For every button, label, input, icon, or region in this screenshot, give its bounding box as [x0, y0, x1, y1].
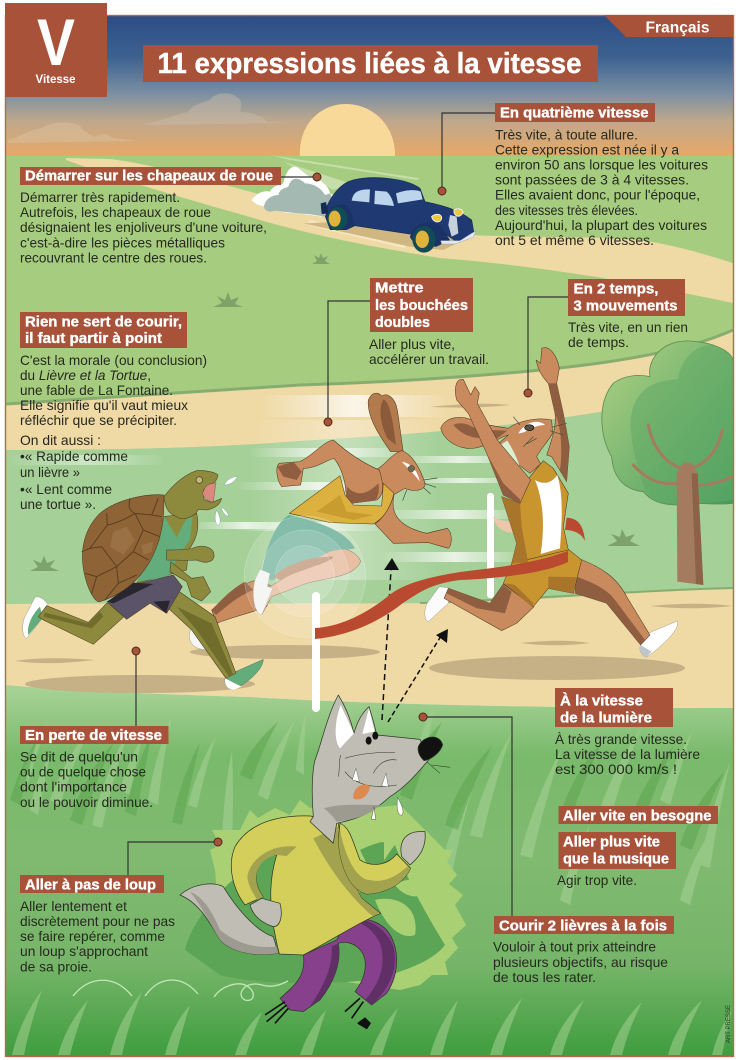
speed lines — [6, 395, 530, 580]
body: plusieurs objectifs, au risque — [493, 955, 668, 970]
leader — [324, 301, 370, 426]
title: 11 expressions liées à la vitesse — [158, 48, 582, 80]
smoke outline — [252, 167, 337, 217]
ears — [368, 393, 403, 452]
shell highlight — [110, 527, 153, 555]
body — [20, 190, 267, 266]
body: discrètement pour ne pas — [20, 914, 175, 929]
wolf — [180, 695, 450, 1028]
grille — [448, 215, 458, 237]
body: du Lièvre et la Tortue, — [20, 368, 151, 383]
back shoe — [425, 587, 452, 622]
body — [493, 940, 668, 985]
raised far arm — [536, 348, 569, 482]
bush: mid patches — [375, 880, 418, 936]
rear bar — [487, 493, 494, 598]
vest fold — [317, 495, 373, 520]
smoke — [252, 167, 337, 217]
body: est 300 000 km/s ! — [555, 762, 677, 777]
label — [20, 312, 187, 348]
body: Démarrer très rapidement. — [20, 190, 180, 205]
tail — [180, 884, 278, 955]
sky — [6, 16, 733, 157]
callout: Rien ne sert de courir — [20, 312, 207, 512]
body: recouvrant le centre des roues. — [20, 250, 207, 266]
shorts — [262, 515, 355, 581]
arrow up — [382, 558, 399, 720]
leader — [438, 113, 495, 195]
cloud: left — [8, 122, 140, 143]
car shadow — [303, 222, 470, 250]
tab word: Vitesse — [36, 74, 76, 86]
grass tufts — [30, 253, 640, 571]
teeth — [352, 768, 388, 787]
body: un lièvre » — [20, 465, 80, 480]
headlights — [432, 209, 463, 222]
label — [558, 832, 676, 869]
cloud: right — [145, 93, 296, 125]
ribbon tail — [565, 518, 585, 541]
front leg shade — [575, 577, 645, 645]
tree trunk — [677, 463, 703, 585]
callout: Démarrer sur les chapeaux de roue — [20, 167, 321, 266]
label: 3 mouvements — [574, 298, 678, 314]
shell — [82, 495, 164, 602]
car body — [324, 178, 474, 242]
glow rings — [244, 516, 366, 637]
shadow tortoise — [25, 675, 255, 693]
tyre — [412, 226, 436, 253]
callout: Mettre les bouchées doubles — [324, 278, 489, 426]
leg shade — [43, 612, 103, 628]
shorts — [503, 549, 582, 607]
ear inner — [380, 399, 396, 445]
body: c'est-à-dire les pièces métalliques — [20, 236, 225, 250]
torso shade — [502, 497, 528, 563]
tongue — [353, 784, 370, 799]
body: désignaient les enjoliveurs d'une voiture, — [20, 220, 267, 235]
body: ont 5 et même 6 vitesses. — [495, 233, 654, 248]
letter tab — [5, 3, 107, 97]
front wheel — [412, 226, 436, 253]
body: une tortue ». — [20, 497, 96, 512]
eye patch — [402, 462, 420, 482]
arrow diagonal — [388, 629, 448, 722]
eye 2 — [372, 732, 378, 740]
body: Aller lentement et — [20, 899, 127, 914]
hare rear shoe — [189, 629, 208, 650]
body — [555, 732, 700, 777]
body — [495, 128, 708, 248]
body: La vitesse de la lumière — [555, 747, 700, 762]
body: ou de quelque chose — [20, 764, 146, 780]
far arm behind — [493, 517, 515, 533]
shorts shade — [505, 577, 577, 607]
tree branches — [633, 425, 732, 485]
shorts fold — [273, 557, 333, 580]
grass blades: foreground — [12, 990, 732, 1055]
body: Autrefois, les chapeaux de roue — [20, 205, 211, 220]
tuft — [213, 292, 243, 307]
leg shade — [177, 607, 233, 677]
front shoe — [225, 659, 263, 690]
body — [568, 320, 688, 350]
body — [369, 337, 489, 367]
label: Rien ne sert de courir, — [25, 314, 182, 330]
rear leg shade — [212, 582, 253, 615]
fenders — [325, 204, 450, 247]
road: upper curve with car — [6, 158, 733, 450]
trunk shade — [692, 473, 703, 585]
grass — [6, 685, 733, 1056]
white stripe — [535, 475, 562, 554]
tail shade — [190, 892, 278, 955]
head — [310, 695, 430, 843]
label: Courir 2 lièvres à la fois — [499, 918, 667, 934]
body: de tous les rater. — [493, 970, 596, 985]
credit: ART PRESSE — [725, 1004, 732, 1043]
dashed arrows — [382, 558, 448, 722]
eye — [525, 425, 534, 431]
upper arm — [167, 546, 214, 562]
label — [370, 278, 473, 332]
leader — [419, 713, 512, 916]
smoke fill — [264, 179, 333, 217]
body: C'est la morale (ou conclusion) — [20, 353, 207, 368]
callout: En perte de vitesse — [20, 647, 168, 810]
label: Aller plus vite — [563, 834, 660, 850]
tree — [602, 341, 733, 585]
body: Très vite, à toute allure. — [495, 128, 638, 142]
tuft — [312, 253, 330, 264]
vest — [289, 476, 394, 524]
tank top — [137, 515, 193, 582]
body: Agir trop vite. — [557, 873, 637, 888]
neck and head — [164, 471, 222, 519]
subject tab: Français — [646, 20, 710, 36]
hare: mid-stride — [212, 393, 451, 637]
finishing hare — [425, 348, 678, 657]
label: de la lumière — [560, 710, 652, 726]
exhaust — [321, 202, 328, 214]
callout: Aller vite en besogne: Aller vite en besogne — [563, 808, 712, 824]
body: •« Lent comme — [20, 482, 112, 497]
middle meadow — [6, 412, 733, 604]
front leg — [575, 558, 650, 645]
raised near arm — [455, 379, 531, 503]
label: doubles — [375, 314, 430, 331]
label: À la vitesse — [560, 692, 643, 710]
rear leg — [212, 580, 273, 623]
shoe colour — [28, 607, 43, 635]
shorts dark — [107, 583, 170, 613]
front arm — [375, 495, 451, 548]
leader — [281, 173, 321, 181]
whiskers — [513, 417, 567, 447]
rear leg — [38, 603, 124, 644]
body: se faire repérer, comme — [20, 929, 165, 944]
eyes — [366, 737, 372, 745]
label: Démarrer sur les chapeaux de roue — [25, 168, 273, 184]
drops — [371, 797, 403, 819]
body: accélérer un travail. — [369, 352, 489, 367]
finish post — [312, 592, 320, 712]
right hand — [401, 831, 425, 865]
back leg shade — [447, 585, 512, 613]
label: Mettre — [375, 280, 424, 296]
eye patch — [518, 422, 545, 433]
front leg — [253, 548, 361, 615]
sun — [300, 104, 395, 157]
body: On dit aussi : — [20, 433, 101, 448]
body: dont l'importance — [20, 780, 127, 794]
body — [20, 899, 175, 974]
body: Elle signifie qu'il vaut mieux — [20, 398, 188, 413]
head and ears — [441, 417, 553, 473]
near arm shade — [487, 453, 520, 503]
body: Aller plus vite, — [369, 337, 455, 352]
label — [568, 279, 685, 316]
arm shade — [277, 462, 379, 504]
leader — [128, 838, 222, 875]
eye — [408, 465, 415, 472]
callout: En 2 temps, 3 mouvements — [524, 279, 688, 397]
toe — [225, 678, 242, 690]
meadow — [6, 156, 733, 450]
shirt — [231, 816, 381, 955]
torso — [137, 513, 198, 583]
bush: light — [210, 800, 466, 990]
windows — [352, 189, 423, 206]
pants — [280, 920, 397, 1012]
leader — [132, 647, 140, 726]
bush: dark — [185, 845, 445, 983]
bumper — [441, 231, 476, 244]
head — [377, 451, 425, 507]
body: une fable de La Fontaine. — [20, 383, 173, 398]
whiskers — [403, 478, 437, 501]
callout: Courir 2 lièvres à la fois — [419, 713, 674, 985]
tuft — [607, 529, 640, 546]
tuft — [30, 556, 59, 571]
grass blades: dark — [10, 722, 724, 850]
scutes — [82, 498, 162, 600]
callout: En quatrième vitesse — [438, 103, 708, 248]
callout: Aller à pas de loup — [20, 838, 222, 974]
label: les bouchées — [375, 297, 468, 314]
label: que la musique — [563, 850, 669, 868]
body: réfléchir que se précipiter. — [20, 413, 177, 428]
body: Elles avaient donc, pour l'époque, — [495, 188, 700, 202]
rear arm — [277, 440, 383, 504]
tree canopy — [602, 341, 733, 505]
back leg — [444, 584, 534, 631]
shorts — [107, 575, 182, 619]
label: Aller à pas de loup — [25, 876, 156, 894]
green lens edge — [6, 330, 733, 404]
callout: Aller plus vite que la musique — [557, 832, 676, 888]
far arm shade — [548, 383, 569, 482]
body: Cette expression est née il y a — [495, 142, 679, 158]
rear wheel — [327, 207, 348, 230]
body: de sa proie. — [20, 960, 92, 974]
tortoise — [23, 471, 263, 690]
body: environ 50 ans lorsque les voitures — [495, 158, 708, 172]
shoe — [253, 569, 273, 615]
leader — [524, 297, 569, 397]
nose — [418, 737, 443, 761]
right sleeve — [338, 823, 411, 894]
neck gap — [496, 441, 521, 471]
label — [555, 688, 673, 727]
claws — [265, 998, 370, 1028]
tyre — [327, 207, 348, 230]
callout: À la vitesse de la lumière — [555, 688, 700, 777]
ear inner — [453, 423, 507, 438]
body: un loup s'approchant — [20, 944, 148, 959]
body: de temps. — [568, 335, 629, 350]
grass blades: light — [18, 706, 730, 905]
body: Vouloir à tout prix atteindre — [493, 940, 656, 954]
front leg — [168, 592, 236, 678]
body: •« Rapide comme — [20, 449, 128, 464]
body: À très grande vitesse. — [555, 732, 687, 747]
toe — [640, 645, 652, 657]
left hand — [250, 898, 281, 927]
rear shoe — [23, 597, 48, 638]
shadows — [15, 404, 733, 693]
eye — [196, 477, 203, 483]
bush: upper patch — [360, 842, 384, 866]
ears inner — [336, 705, 375, 748]
body: Se dit de quelqu'un — [20, 750, 138, 764]
speed streaks — [270, 155, 420, 248]
shadow hare — [190, 645, 380, 659]
body — [20, 750, 153, 810]
lower arm — [170, 562, 211, 601]
body: Très vite, en un rien — [568, 320, 688, 335]
torso — [502, 461, 568, 563]
tree shading — [631, 345, 733, 503]
face lines — [338, 752, 450, 786]
label: En perte de vitesse — [25, 727, 162, 744]
body: ou le pouvoir diminue. — [20, 795, 153, 810]
arm shadow — [247, 827, 379, 917]
hub — [329, 211, 341, 227]
neck shade — [324, 805, 380, 822]
finish ribbon — [315, 551, 568, 639]
body — [20, 353, 207, 512]
front shoe — [640, 621, 678, 657]
body: des vitesses très élevées. — [495, 203, 638, 218]
body: sont passées de 3 à 4 vitesses. — [495, 172, 689, 188]
running track — [6, 588, 733, 708]
subject tab — [604, 15, 733, 37]
body: Aujourd'hui, la plupart des voitures — [495, 218, 707, 233]
label: En quatrième vitesse — [500, 104, 648, 122]
sweat drops — [215, 477, 237, 526]
pants shade — [310, 919, 395, 1007]
car scene — [252, 155, 476, 253]
shadow finisher — [429, 656, 685, 680]
letter V: V — [37, 5, 75, 79]
label: En 2 temps, — [574, 280, 658, 298]
wavy lines — [73, 980, 288, 1000]
mouth — [203, 483, 216, 502]
label: il faut partir à point — [25, 330, 162, 347]
hub — [416, 231, 429, 248]
sleeve shade — [338, 830, 411, 894]
